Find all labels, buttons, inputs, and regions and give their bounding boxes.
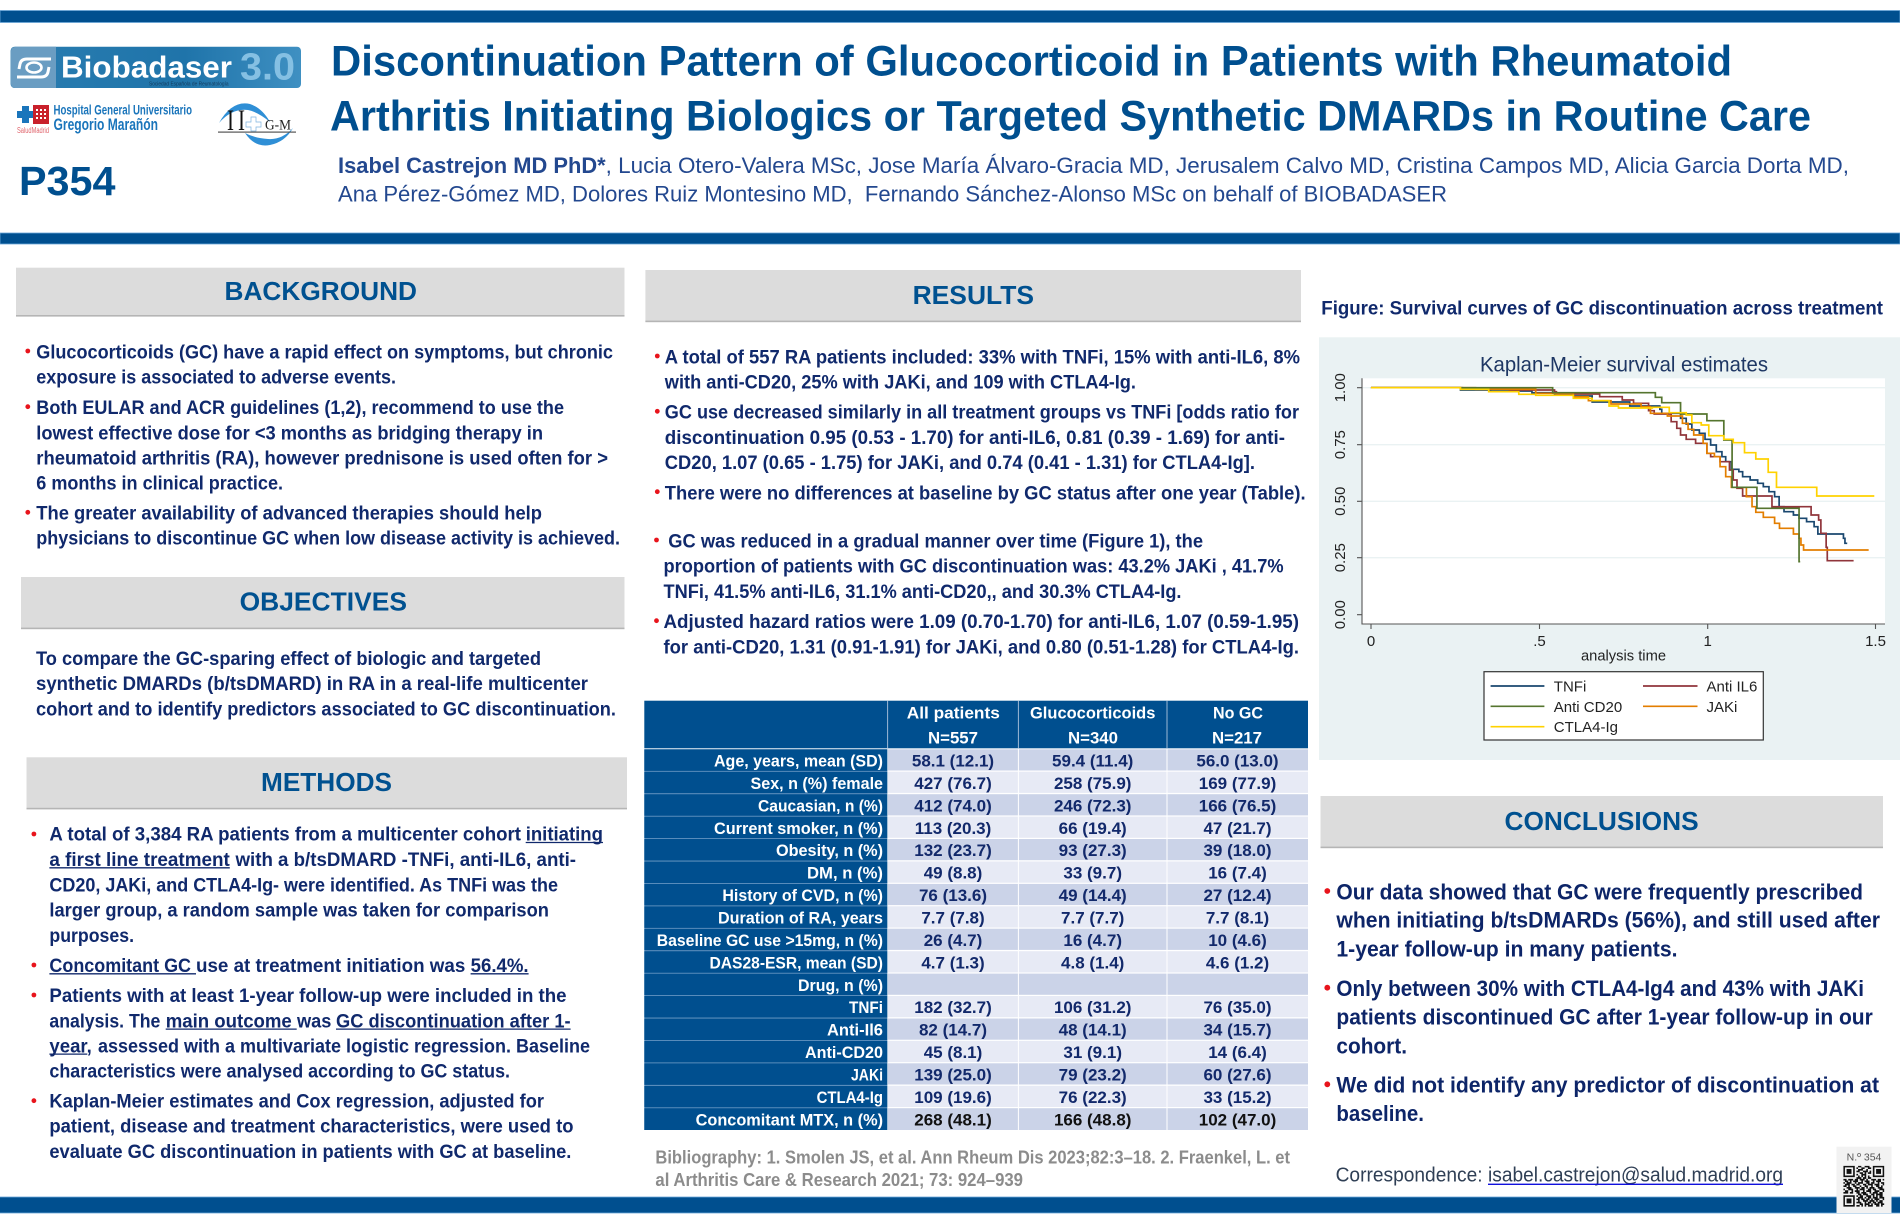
- row: CVD: [644, 884, 1308, 906]
- results text: [654, 346, 1306, 658]
- row: concomitant MTX: 166 (48.8): [1054, 1110, 1131, 1129]
- heading: objectives: OBJECTIVES: [240, 589, 407, 617]
- methods text: Concomitant GC: [49, 955, 191, 977]
- row: caucasian: [644, 794, 1308, 816]
- methods text: analysis. The: [49, 1010, 161, 1032]
- results text: discontinuation 0.95 (0.53 - 1.70) for anti-IL6, 0.81 (0.39 - 1.69) for anti-: [665, 427, 1285, 449]
- title: Discontinuation Pattern of Glucocorticoid in Patients with Rheumatoid: [331, 38, 1732, 86]
- row: CVD: 76 (13.6): [919, 886, 987, 905]
- bottom band: [0, 1197, 1900, 1213]
- QR code: N.º 354: [1847, 1152, 1882, 1164]
- heading: results: [645, 270, 1301, 322]
- row: caucasian: Caucasian, n (%): [758, 796, 883, 815]
- methods text: with a b/tsDMARD -TNFi, anti-IL6, anti-: [235, 849, 576, 871]
- background text: physicians to discontinue GC when low disease activity is achieved.: [36, 528, 620, 550]
- methods text: patient, disease and treatment characteristics, were used to: [49, 1116, 574, 1138]
- conclusions text: We did not identify any predictor of discontinuation at: [1336, 1073, 1880, 1098]
- row: anti-CD20: 14 (6.4): [1208, 1043, 1267, 1062]
- table header: N=340: [1068, 728, 1118, 747]
- correspondence: Correspondence:: [1336, 1165, 1483, 1187]
- results text: A total of 557 RA patients included: 33% with TNFi, 15% with anti-IL6, 8%: [665, 346, 1300, 368]
- title: [330, 38, 1811, 141]
- row: sex: 169 (77.9): [1199, 774, 1276, 793]
- row: caucasian: 166 (76.5): [1199, 796, 1276, 815]
- logo: Biobadaser 3.0: Biobadaser: [61, 49, 232, 84]
- y axis labels: 0.75: [1332, 430, 1349, 459]
- row: CTLA4-Ig: CTLA4-Ig: [817, 1088, 883, 1107]
- row: JAKi: JAKi: [851, 1066, 883, 1084]
- row: smoker: 113 (20.3): [915, 819, 991, 838]
- row: duration: 7.7 (8.1): [1206, 908, 1269, 928]
- legend: Anti IL6: [1706, 678, 1757, 696]
- row: concomitant MTX: Concomitant MTX, n (%): [696, 1110, 883, 1129]
- row: JAKi: 139 (25.0): [914, 1066, 992, 1084]
- row: duration: 7.7 (7.8): [921, 908, 985, 928]
- row: JAKi: 60 (27.6): [1203, 1066, 1272, 1084]
- QR code: [1836, 1147, 1892, 1213]
- methods text: characteristics were analysed according to GC status.: [49, 1061, 510, 1083]
- logo: Hospital Gregorio Marañón: [17, 102, 192, 135]
- row: obesity: 132 (23.7): [914, 841, 992, 860]
- bibliography: al Arthritis Care & Research 2021; 73: 924–939: [655, 1170, 1023, 1190]
- background text: lowest effective dose for <3 months as bridging therapy in: [36, 422, 543, 444]
- bibliography: Bibliography: 1. Smolen JS, et al. Ann Rheum Dis 2023;82:3–18. 2. Fraenkel, L. et: [655, 1147, 1290, 1167]
- row: JAKi: 79 (23.2): [1059, 1066, 1127, 1084]
- methods text: Kaplan-Meier estimates and Cox regression, adjusted for: [49, 1091, 544, 1113]
- title: Arthritis Initiating Biologics or Targeted Synthetic DMARDs in Routine Care: [330, 93, 1811, 141]
- logo: Hospital Gregorio Marañón: Gregorio Marañón: [54, 116, 158, 134]
- legend: JAKi: [1706, 699, 1737, 716]
- row: caucasian: 246 (72.3): [1054, 796, 1131, 815]
- label column separators: [644, 749, 887, 1130]
- row: age: 58.1 (12.1): [912, 752, 994, 770]
- x axis labels: analysis time: [1581, 648, 1666, 665]
- y axis labels: 1.00: [1332, 373, 1349, 402]
- row: CTLA4-Ig: [644, 1086, 1308, 1107]
- legend: [1484, 672, 1763, 740]
- curve: CTLA4-Ig: [1371, 388, 1874, 496]
- chart title: Kaplan-Meier survival estimates: [1480, 354, 1768, 377]
- methods text: A total of 3,384 RA patients from a multicenter cohort: [49, 824, 522, 846]
- background text: The greater availability of advanced therapies should help: [36, 502, 542, 524]
- row: baseline GC: 10 (4.6): [1208, 931, 1267, 950]
- background text: Both EULAR and ACR guidelines (1,2), recommend to use the: [36, 397, 564, 419]
- row: drug: Drug, n (%): [798, 976, 883, 995]
- row: anti-Il6: [644, 1018, 1308, 1040]
- logo: Biobadaser 3.0: Sociedad Española de Reumatología: [149, 82, 229, 88]
- row: age: Age, years, mean (SD): [714, 752, 883, 770]
- y axis labels: 0.25: [1332, 543, 1349, 572]
- row: JAKi: [644, 1063, 1308, 1085]
- x axis labels: 1: [1704, 633, 1712, 650]
- table header: [644, 701, 1308, 748]
- authors: Isabel Castrejon MD PhD*: [338, 153, 606, 178]
- row: baseline GC: Baseline GC use >15mg, n (%): [657, 931, 883, 950]
- row: DM: DM, n (%): [807, 864, 883, 883]
- poster number: P354: [19, 158, 116, 204]
- methods text: evaluate GC discontinuation in patients with GC at baseline.: [49, 1141, 571, 1163]
- row: obesity: Obesity, n (%): [776, 841, 883, 860]
- logo: Hospital Gregorio Marañón: SaludMadrid: [17, 126, 49, 135]
- row: sex: 258 (75.9): [1054, 774, 1131, 793]
- heading: results: RESULTS: [913, 282, 1034, 310]
- correspondence: [1336, 1165, 1783, 1187]
- row: TNFi: 106 (31.2): [1054, 998, 1131, 1017]
- logo: II G-M: [218, 103, 296, 146]
- table header: No GC: [1213, 703, 1263, 722]
- x axis labels: 1.5: [1865, 633, 1886, 650]
- objectives text: To compare the GC-sparing effect of biologic and targeted: [36, 648, 541, 670]
- background text: exposure is associated to adverse events.: [36, 366, 396, 388]
- panel: methods: [26, 757, 627, 1163]
- row: anti-Il6: 48 (14.1): [1059, 1021, 1127, 1040]
- heading: conclusions: [1320, 796, 1883, 848]
- row: TNFi: 76 (35.0): [1203, 998, 1272, 1017]
- heading: methods: METHODS: [261, 769, 392, 797]
- chart: Kaplan-Meier survival estimates: [1319, 337, 1900, 760]
- table header: All patients: [907, 703, 1000, 722]
- panel: conclusions: [1320, 796, 1883, 1126]
- row: TNFi: [644, 996, 1308, 1018]
- row: obesity: 93 (27.3): [1059, 841, 1127, 860]
- logo: II G-M: G-M: [265, 117, 291, 133]
- row: anti-Il6: Anti-Il6: [827, 1021, 883, 1040]
- methods text: GC discontinuation after 1-: [336, 1010, 571, 1032]
- row: anti-CD20: Anti-CD20: [805, 1043, 883, 1062]
- row: anti-CD20: [644, 1041, 1308, 1062]
- logo: Hospital Gregorio Marañón: Hospital General Universitario: [54, 102, 192, 118]
- y axis labels: 0.50: [1332, 487, 1349, 516]
- heading: background: [16, 268, 624, 317]
- authors: , Lucia Otero-Valera MSc, Jose María Álvaro-Gracia MD, Jerusalem Calvo MD, Cristina Campos MD, Alicia Garcia Dorta MD,: [606, 153, 1849, 178]
- row: DM: 49 (8.8): [924, 864, 982, 883]
- heading: methods: [26, 757, 627, 809]
- logo: II G-M: I: [238, 104, 245, 137]
- row: obesity: 39 (18.0): [1203, 841, 1272, 860]
- row: DAS28: DAS28-ESR, mean (SD): [710, 953, 883, 972]
- methods text: was: [296, 1010, 331, 1032]
- panel: results: [645, 270, 1306, 658]
- bibliography: [655, 1147, 1290, 1190]
- background text: rheumatoid arthritis (RA), however prednisone is used often for >: [36, 447, 608, 469]
- row: CVD: History of CVD, n (%): [722, 886, 883, 905]
- row: duration: Duration of RA, years: [718, 908, 883, 928]
- authors: Ana Pérez-Gómez MD, Dolores Ruiz Montesino MD, Fernando Sánchez-Alonso MSc on behalf of BIOBADASER: [338, 182, 1447, 207]
- header band: [0, 233, 1900, 244]
- results text: with anti-CD20, 25% with JAKi, and 109 with CTLA4-Ig.: [664, 371, 1136, 393]
- methods text: main outcome: [166, 1010, 292, 1032]
- logo: Biobadaser 3.0: [11, 46, 301, 88]
- row: TNFi: TNFi: [849, 998, 883, 1017]
- row: caucasian: 412 (74.0): [914, 796, 992, 815]
- conclusions text: 1-year follow-up in many patients.: [1336, 937, 1678, 962]
- row: DAS28: 4.8 (1.4): [1061, 953, 1124, 972]
- conclusions text: baseline.: [1336, 1101, 1424, 1126]
- row: CTLA4-Ig: 109 (19.6): [914, 1088, 992, 1107]
- table: baseline characteristics: [644, 701, 1308, 1130]
- y axis labels: [1332, 373, 1349, 629]
- methods text: year,: [49, 1035, 92, 1057]
- conclusions text: [1324, 879, 1880, 1126]
- row: duration: [644, 906, 1308, 928]
- conclusions text: cohort.: [1336, 1033, 1407, 1058]
- top band: [0, 10, 1900, 22]
- results text: There were no differences at baseline by GC status after one year (Table).: [665, 482, 1306, 504]
- table header: N=557: [928, 728, 978, 747]
- row: duration: 7.7 (7.7): [1061, 908, 1124, 928]
- row: DAS28: [644, 951, 1308, 973]
- row: sex: 427 (76.7): [914, 774, 992, 793]
- row: CVD: 27 (12.4): [1203, 886, 1272, 905]
- methods text: Patients with at least 1-year follow-up were included in the: [49, 985, 567, 1007]
- row: CTLA4-Ig: 33 (15.2): [1203, 1088, 1272, 1107]
- row: baseline GC: [644, 929, 1308, 950]
- logo: Biobadaser 3.0: 3.0: [240, 46, 295, 88]
- methods text: initiating: [526, 824, 603, 846]
- row: smoker: Current smoker, n (%): [714, 819, 883, 838]
- row: anti-Il6: 82 (14.7): [919, 1021, 987, 1040]
- row: concomitant MTX: 268 (48.1): [914, 1110, 992, 1129]
- x axis labels: [1367, 633, 1886, 665]
- row: age: 56.0 (13.0): [1196, 752, 1279, 770]
- methods text: purposes.: [49, 925, 134, 947]
- objectives text: [36, 648, 616, 721]
- row: DM: 33 (9.7): [1063, 864, 1122, 883]
- row: age: 59.4 (11.4): [1052, 752, 1133, 770]
- row: TNFi: 182 (32.7): [914, 998, 992, 1017]
- results text: CD20, 1.07 (0.65 - 1.75) for JAKi, and 0.74 (0.41 - 1.31) for CTLA4-Ig].: [665, 452, 1255, 474]
- methods text: larger group, a random sample was taken for comparison: [49, 900, 549, 922]
- row: concomitant MTX: 102 (47.0): [1199, 1110, 1276, 1129]
- methods text: 56.4%.: [471, 955, 529, 977]
- background text: 6 months in clinical practice.: [36, 472, 283, 494]
- survival curves: [1371, 388, 1874, 562]
- row: DM: 16 (7.4): [1208, 864, 1267, 883]
- objectives text: cohort and to identify predictors associated to GC discontinuation.: [36, 699, 616, 721]
- row: anti-CD20: 45 (8.1): [924, 1043, 982, 1062]
- table header: Glucocorticoids: [1030, 703, 1155, 722]
- methods text: assessed with a multivariate logistic regression. Baseline: [98, 1035, 590, 1057]
- row: DAS28: 4.7 (1.3): [921, 953, 985, 972]
- curve: Anti CD20: [1371, 388, 1800, 562]
- methods text: use at treatment initiation was: [196, 955, 465, 977]
- results text: proportion of patients with GC discontinuation was: 43.2% JAKi , 41.7%: [664, 556, 1284, 578]
- row: anti-CD20: 31 (9.1): [1063, 1043, 1122, 1062]
- row: sex: [644, 772, 1308, 793]
- row: DAS28: 4.6 (1.2): [1206, 953, 1269, 972]
- heading: conclusions: CONCLUSIONS: [1504, 808, 1699, 836]
- row: baseline GC: 26 (4.7): [924, 931, 982, 950]
- results text: GC use decreased similarly in all treatment groups vs TNFi [odds ratio for: [665, 402, 1299, 424]
- row: sex: Sex, n (%) female: [750, 774, 883, 793]
- curve: TNFi: [1371, 388, 1847, 543]
- authors: [338, 153, 1849, 207]
- objectives text: synthetic DMARDs (b/tsDMARD) in RA in a real-life multicenter: [36, 673, 588, 695]
- results text: TNFi, 41.5% anti-IL6, 31.1% anti-CD20,, and 30.3% CTLA4-Ig.: [664, 581, 1182, 603]
- results text: for anti-CD20, 1.31 (0.91-1.91) for JAKi, and 0.80 (0.51-1.28) for CTLA4-Ig.: [664, 636, 1299, 658]
- background text: Glucocorticoids (GC) have a rapid effect on symptoms, but chronic: [36, 341, 613, 363]
- heading: objectives: [21, 577, 624, 629]
- panel: background: [16, 268, 624, 550]
- row: concomitant MTX: [644, 1108, 1308, 1130]
- row: baseline GC: 16 (4.7): [1063, 931, 1122, 950]
- conclusions text: patients discontinued GC after 1-year follow-up in our: [1336, 1005, 1873, 1030]
- figure heading: Figure: Survival curves of GC discontinuation across treatment: [1321, 297, 1884, 319]
- legend: TNFi: [1554, 678, 1586, 696]
- logo: II G-M: I: [227, 104, 234, 137]
- x axis labels: .5: [1533, 633, 1546, 650]
- curve: Anti IL6: [1371, 388, 1854, 561]
- background text: [25, 341, 620, 550]
- results text: Adjusted hazard ratios were 1.09 (0.70-1.70) for anti-IL6, 1.07 (0.59-1.95): [664, 611, 1299, 633]
- row: DM: [644, 862, 1308, 883]
- x axis labels: 0: [1367, 633, 1375, 650]
- methods text: CD20, JAKi, and CTLA4-Ig- were identified. As TNFi was the: [49, 875, 558, 897]
- conclusions text: when initiating b/tsDMARDs (56%), and still used after: [1335, 908, 1880, 933]
- methods text: a first line treatment: [49, 849, 230, 871]
- row: age: [644, 749, 1308, 771]
- correspondence: isabel.castrejon@salud.madrid.org: [1488, 1165, 1783, 1187]
- legend: Anti CD20: [1554, 699, 1622, 716]
- methods text: [32, 824, 603, 1163]
- row: obesity: [644, 839, 1308, 861]
- legend: CTLA4-Ig: [1554, 719, 1618, 736]
- row: smoker: 47 (21.7): [1203, 819, 1272, 838]
- heading: background: BACKGROUND: [224, 278, 417, 306]
- results text: GC was reduced in a gradual manner over time (Figure 1), the: [668, 531, 1203, 553]
- row: smoker: [644, 817, 1308, 838]
- row: CTLA4-Ig: 76 (22.3): [1059, 1088, 1127, 1107]
- conclusions text: Our data showed that GC were frequently prescribed: [1336, 879, 1863, 904]
- conclusions text: Only between 30% with CTLA4-Ig4 and 43% with JAKi: [1336, 976, 1864, 1001]
- y axis labels: 0.00: [1332, 600, 1349, 629]
- panel: objectives: [21, 577, 624, 721]
- row: anti-Il6: 34 (15.7): [1203, 1021, 1272, 1040]
- row: CVD: 49 (14.4): [1059, 886, 1127, 905]
- table header: N=217: [1212, 728, 1262, 747]
- row: smoker: 66 (19.4): [1059, 819, 1127, 838]
- curve: JAKi: [1371, 388, 1869, 550]
- row: drug: [644, 974, 1308, 995]
